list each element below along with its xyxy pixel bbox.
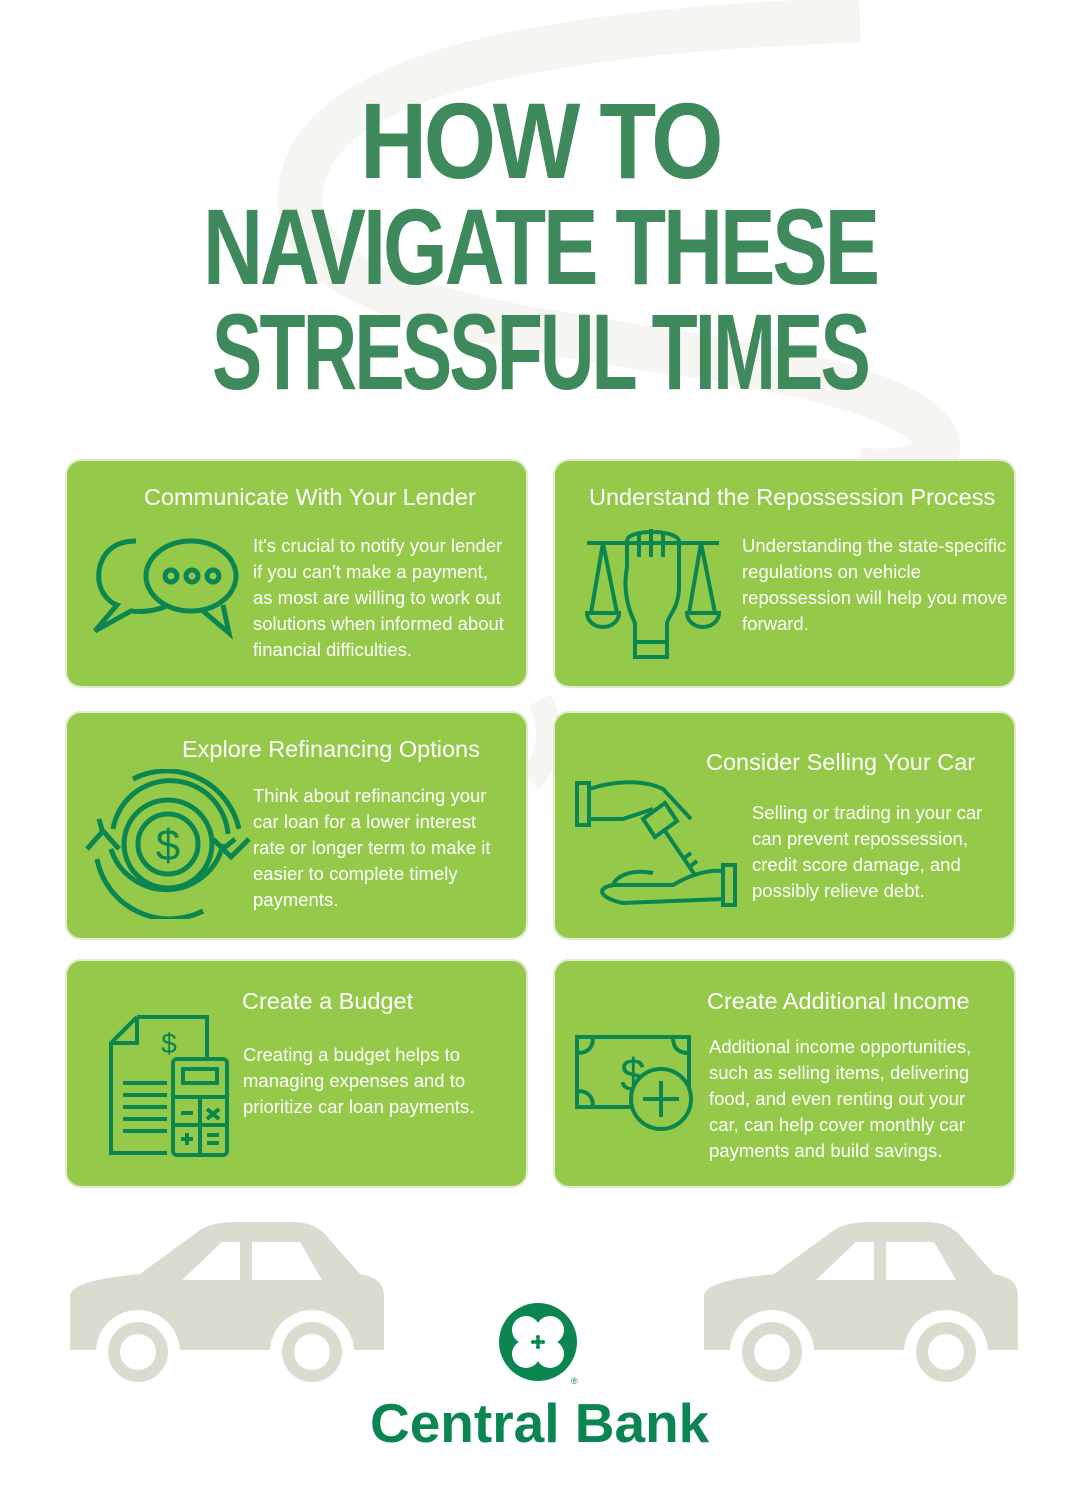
text: [709, 1036, 971, 1161]
text: payments and build savings.: [709, 1140, 942, 1161]
panel: budget: [67, 961, 526, 1186]
text: Additional income opportunities,: [709, 1036, 971, 1057]
heading: Consider Selling Your Car: [706, 749, 975, 775]
background road tracks: [278, 0, 960, 788]
text: credit score damage, and: [752, 854, 961, 875]
panel: communicate: [67, 461, 526, 686]
text: food, and even renting out your: [709, 1088, 965, 1109]
heading: Create a Budget: [242, 988, 413, 1014]
text: if you can't make a payment,: [253, 561, 488, 582]
icon: scales & fist: [585, 529, 721, 659]
text: can prevent repossession,: [752, 828, 968, 849]
panel: income: [555, 961, 1014, 1186]
panel: selling: [555, 713, 1014, 938]
text: such as selling items, delivering: [709, 1062, 969, 1083]
logo: Central Bank: [370, 1303, 710, 1454]
text: [253, 785, 491, 910]
text: rate or longer term to make it: [253, 837, 491, 858]
icon: calculator document: $: [161, 1028, 177, 1059]
icon: hand with key: [575, 780, 737, 907]
text: [742, 535, 1007, 634]
panel: repossession: [555, 461, 1014, 686]
icon: dollar cycle: $: [156, 821, 180, 870]
text: Selling or trading in your car: [752, 802, 982, 823]
text: [752, 802, 982, 901]
icon: car right: [704, 1222, 1018, 1382]
icon: calculator document: [109, 1015, 229, 1157]
icon: dollar cycle: [85, 769, 251, 919]
title: HOW TO: [360, 80, 720, 201]
text: financial difficulties.: [253, 639, 412, 660]
icon: money plus: [575, 1035, 693, 1131]
text: payments.: [253, 889, 338, 910]
icon: speech bubbles: [93, 538, 238, 640]
text: easier to complete timely: [253, 863, 458, 884]
text: car, can help cover monthly car: [709, 1114, 965, 1135]
title: NAVIGATE THESE: [203, 186, 877, 307]
heading: Explore Refinancing Options: [182, 736, 480, 762]
text: Think about refinancing your: [253, 785, 486, 806]
title: [203, 80, 877, 410]
panel: refinancing: [67, 713, 526, 938]
icon: money plus: $: [620, 1049, 646, 1101]
text: Creating a budget helps to: [243, 1044, 460, 1065]
text: solutions when informed about: [253, 613, 504, 634]
text: managing expenses and to: [243, 1070, 465, 1091]
text: [253, 535, 504, 660]
text: repossession will help you move: [742, 587, 1007, 608]
wordmark: Central Bank: [370, 1392, 709, 1454]
text: [243, 1044, 474, 1117]
heading: Understand the Repossession Process: [589, 484, 995, 510]
text: It's crucial to notify your lender: [253, 535, 502, 556]
icon: flower circle: [499, 1303, 578, 1386]
icon: flower circle: ®: [571, 1376, 578, 1386]
text: forward.: [742, 613, 809, 634]
text: prioritize car loan payments.: [243, 1096, 474, 1117]
text: car loan for a lower interest: [253, 811, 476, 832]
icon: car left: [70, 1222, 384, 1382]
text: regulations on vehicle: [742, 561, 921, 582]
heading: Create Additional Income: [707, 988, 970, 1014]
text: Understanding the state-specific: [742, 535, 1006, 556]
text: as most are willing to work out: [253, 587, 501, 608]
text: possibly relieve debt.: [752, 880, 925, 901]
heading: Communicate With Your Lender: [144, 484, 476, 510]
